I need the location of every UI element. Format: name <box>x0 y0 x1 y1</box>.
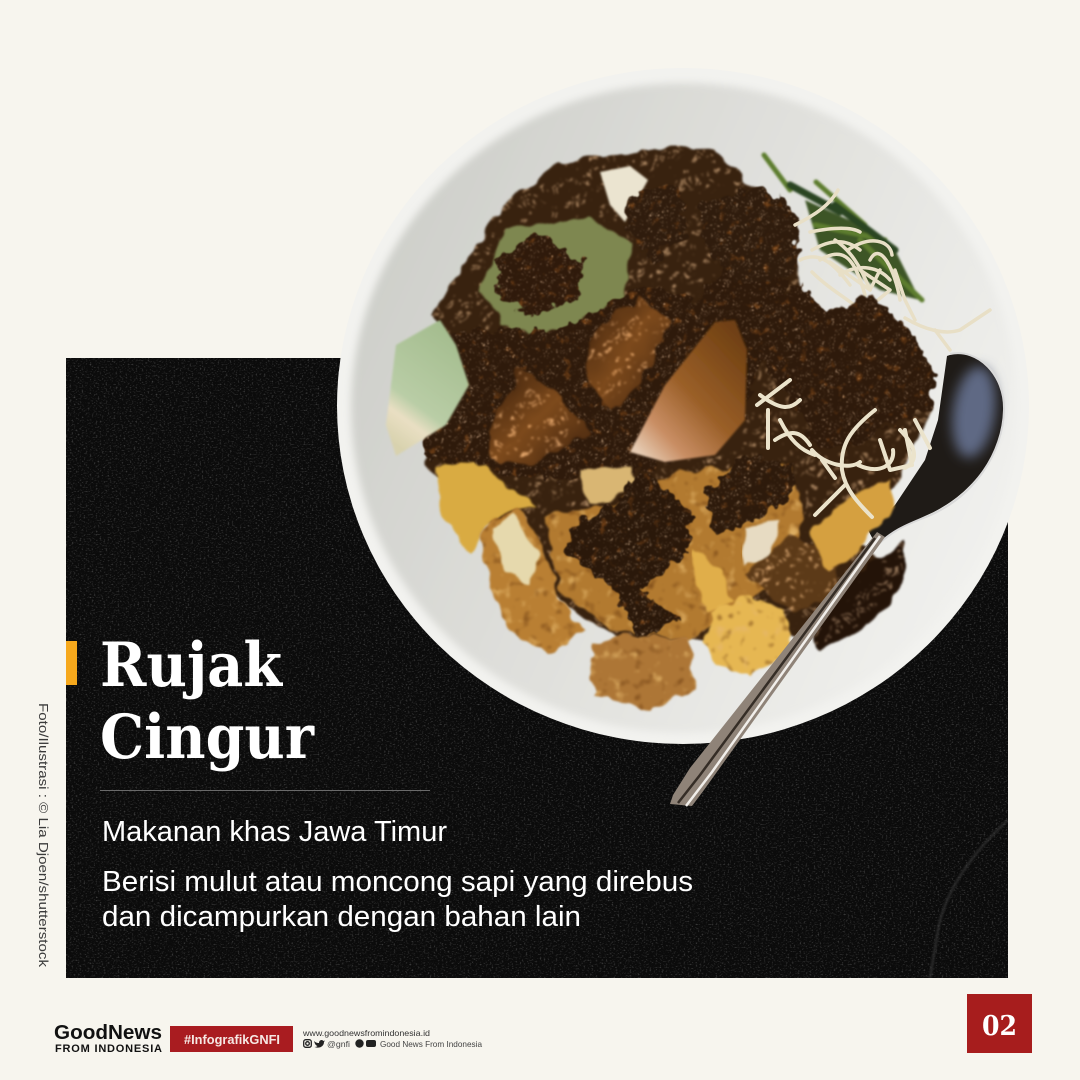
food: bean sprouts lower <box>757 380 930 517</box>
food: yellow tofu left <box>436 462 535 555</box>
footer: social icons and handles <box>304 1039 482 1049</box>
food: potato wedge <box>630 320 747 462</box>
footer: website: www.goodnewsfromindonesia.id <box>302 1028 430 1038</box>
food: tempeh bottom <box>592 635 695 710</box>
photo: plate of rujak cingur <box>337 68 1029 806</box>
icon: youtube <box>366 1040 376 1047</box>
food: bean sprouts upper <box>795 190 990 350</box>
page name: Good News From Indonesia <box>380 1039 482 1049</box>
icon: twitter <box>314 1040 325 1048</box>
food: sauce base <box>425 148 930 640</box>
food: white tofu piece top <box>600 166 648 222</box>
plate <box>337 68 1029 744</box>
food: amber glazed chunks <box>490 295 668 466</box>
text: description: dan dicampurkan dengan bahan lain <box>102 901 581 933</box>
footer: logo: GoodNews <box>54 1022 162 1044</box>
photo credit: Foto/Ilustrasi : © Lia Djoen/shutterstock <box>36 703 51 968</box>
food: gravy right <box>745 535 905 652</box>
spoon: handle <box>670 532 885 806</box>
footer: hashtag badge: #InfografikGNFI <box>184 1032 280 1047</box>
food: sauce over tempeh <box>565 455 795 640</box>
spoon: bowl <box>868 353 1004 546</box>
panel: black stone background <box>66 358 1008 978</box>
icon: instagram <box>304 1040 311 1047</box>
footer: logo: FROM INDONESIA <box>55 1043 162 1055</box>
text: subtitle: Makanan khas Jawa Timur <box>102 816 448 848</box>
food: tempeh and tofu centre <box>545 465 805 640</box>
accent bar <box>66 641 77 685</box>
food: tempeh left <box>480 505 585 655</box>
food: sambal crumbs top <box>700 185 800 285</box>
icon: facebook <box>355 1039 364 1048</box>
food: cut gourd left <box>386 320 469 456</box>
title: Cingur <box>100 702 315 773</box>
title: Rujak <box>100 630 284 701</box>
footer: hashtag badge <box>170 1026 293 1052</box>
footer: logo <box>54 1022 162 1055</box>
handle: @gnfi <box>327 1039 350 1049</box>
food: mounded sauce centre <box>425 255 790 480</box>
title <box>100 630 315 773</box>
food: golden tofu right <box>812 478 893 570</box>
page number: 02 <box>982 1011 1017 1042</box>
text: description: Berisi mulut atau moncong sapi yang direbus <box>102 866 693 898</box>
food: green gourd under sauce <box>480 218 632 332</box>
text: description <box>102 866 693 933</box>
page number <box>967 994 1032 1053</box>
food: leafy greens <box>764 155 922 300</box>
food: sambal mound right <box>755 285 935 450</box>
food: golden tofu pieces <box>695 548 792 678</box>
